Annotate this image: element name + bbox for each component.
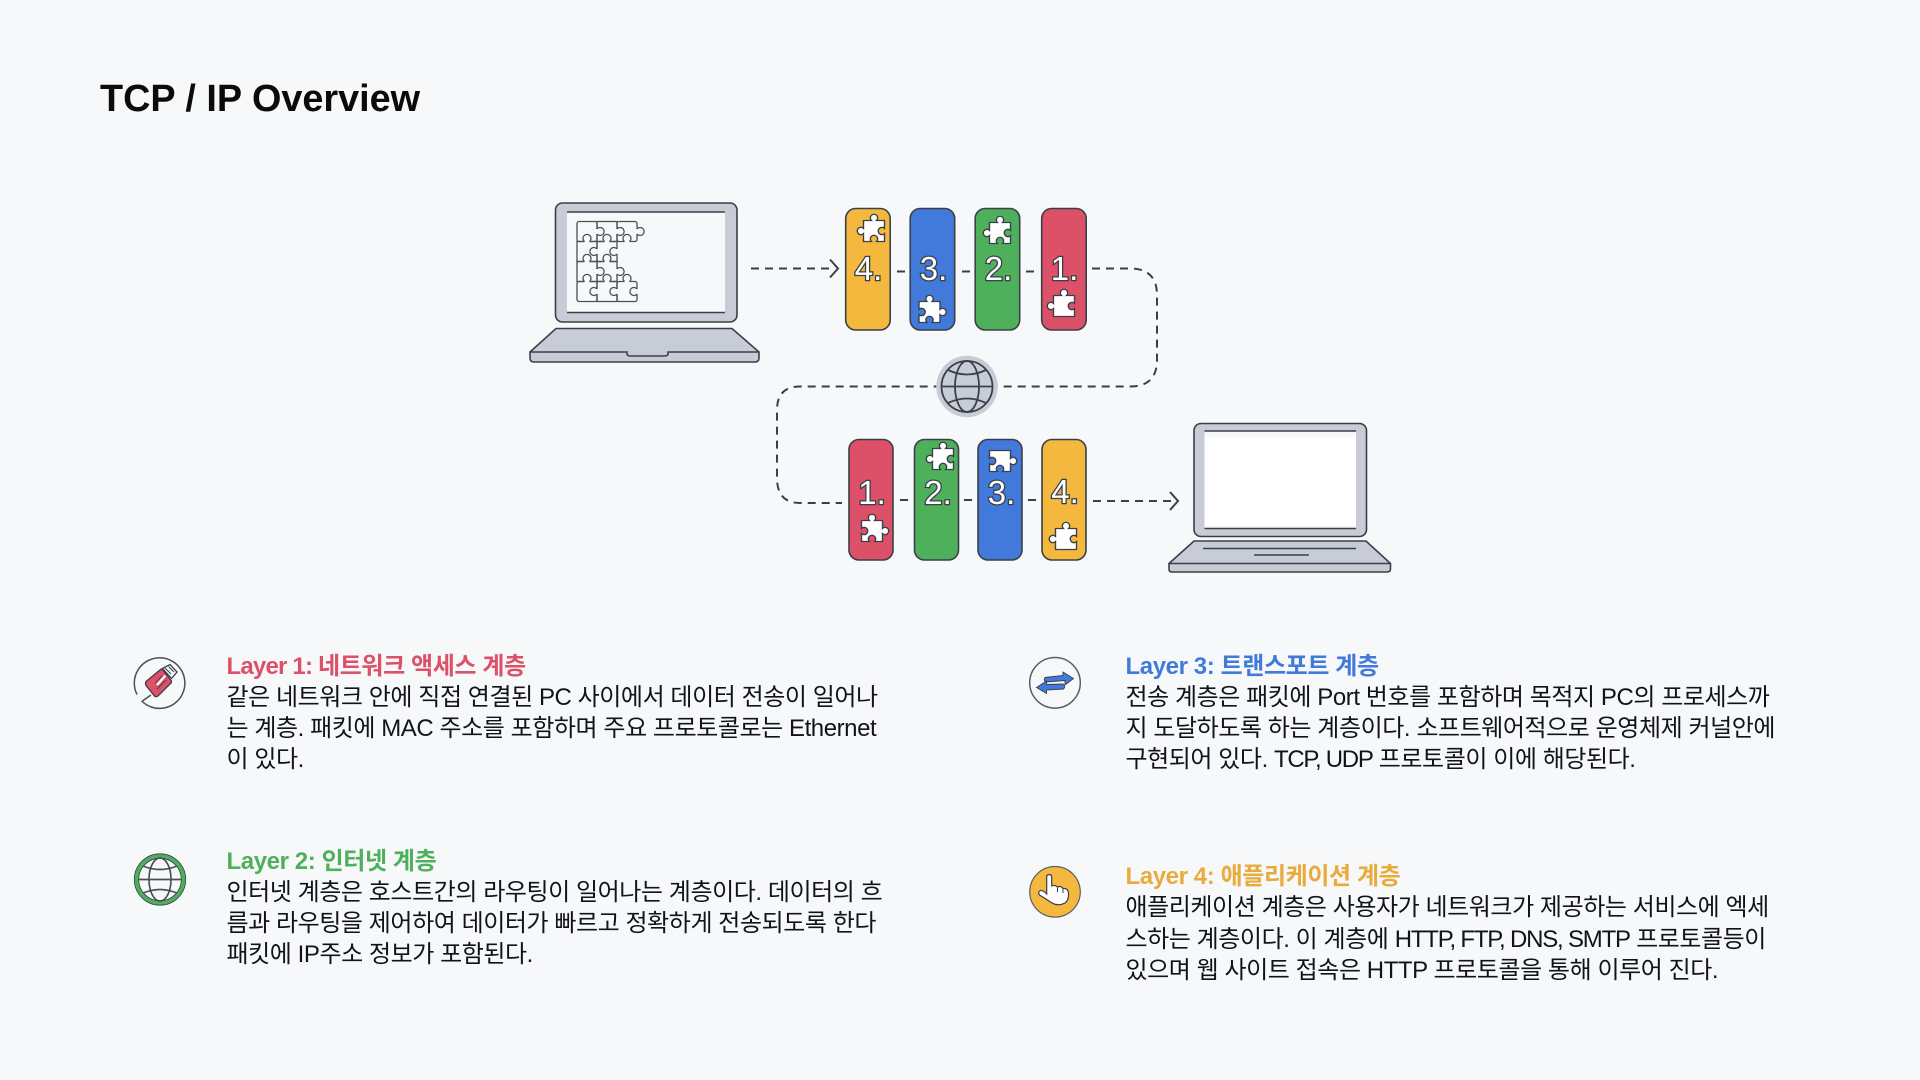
connectors between bottom pills <box>900 499 1036 501</box>
heading: layer 4: Layer 4: 애플리케이션 계층 <box>1126 863 1400 890</box>
body: layer 1: 같은 네트워크 안에 직접 연결된 PC 사이에서 데이터 전송이 일어나 <box>226 684 878 711</box>
pill: layer 2 sender <box>975 208 1020 330</box>
body: layer 1: 는 계층. 패킷에 MAC 주소를 포함하며 주요 프로토콜로는 Ethernet <box>226 715 876 742</box>
pill: layer 2 receiver: 2. <box>924 474 952 511</box>
pill: layer 4 receiver <box>1042 440 1086 560</box>
heading: layer 3: Layer 3: 트랜스포트 계층 <box>1126 653 1379 680</box>
icon: layer 3 transport arrows <box>1030 658 1080 708</box>
body: layer 2: 름과 라우팅을 제어하여 데이터가 빠르고 정확하게 전송되도록 한다 <box>226 910 876 937</box>
connector: dashed route through the globe <box>777 268 1157 503</box>
icon: layer 2 globe <box>134 854 186 905</box>
text block: layer 2 <box>226 848 882 968</box>
body: layer 3 <box>1126 684 1775 773</box>
body: layer 2: 인터넷 계층은 호스트간의 라우팅이 일어나는 계층이다. 데이터의 흐 <box>226 879 882 906</box>
body: layer 4: 애플리케이션 계층은 사용자가 네트워크가 제공하는 서비스에 엑세 <box>1126 894 1769 921</box>
text block: layer 1 <box>226 653 878 773</box>
body: layer 3: 지 도달하도록 하는 계층이다. 소프트웨어적으로 운영체제 커널안에 <box>1126 715 1775 742</box>
body: layer 1 <box>226 684 878 773</box>
pill: layer 2 receiver <box>914 440 958 560</box>
connector: dashed arrow to receiving laptop <box>1093 492 1178 510</box>
pill: layer 4 sender <box>846 208 890 330</box>
title: TCP / IP Overview <box>100 78 420 120</box>
connectors between top pills <box>897 270 1034 272</box>
pill: layer 4 receiver: 4. <box>1051 473 1079 510</box>
body: layer 3: 구현되어 있다. TCP, UDP 프로토콜이 이에 해당된다. <box>1126 746 1636 773</box>
heading: layer 2: Layer 2: 인터넷 계층 <box>226 848 436 875</box>
icon: layer 4 pointing hand <box>1030 866 1080 917</box>
body: layer 4: 있으며 웹 사이트 접속은 HTTP 프로토콜을 통해 이루어 진다. <box>1126 957 1718 984</box>
body: layer 2 <box>226 879 882 968</box>
text block: layer 4 <box>1126 863 1769 984</box>
body: layer 4: 스하는 계층이다. 이 계층에 HTTP, FTP, DNS, SMTP 프로토콜등이 <box>1126 926 1766 953</box>
body: layer 2: 패킷에 IP주소 정보가 포함된다. <box>226 941 533 968</box>
pill: layer 3 sender: 3. <box>920 250 947 287</box>
body: layer 1: 이 있다. <box>226 746 304 773</box>
icon: network globe <box>936 356 998 417</box>
connector: dashed path from sending laptop to pills <box>751 260 838 278</box>
pill: layer 3 sender <box>910 208 955 330</box>
pill: layer 1 sender: 1. <box>1051 250 1078 287</box>
pill: layer 1 sender <box>1042 208 1086 330</box>
pill: layer 3 receiver <box>978 440 1022 560</box>
laptop: sender <box>530 203 759 362</box>
pill: layer 1 receiver: 1. <box>858 474 886 511</box>
laptop: receiver <box>1169 424 1390 572</box>
heading: layer 1: Layer 1: 네트워크 액세스 계층 <box>226 653 526 680</box>
pill: layer 1 receiver <box>849 440 893 560</box>
icon: layer 1 network plug <box>134 658 185 708</box>
body: layer 4 <box>1126 894 1769 984</box>
pill: layer 2 sender: 2. <box>985 250 1012 287</box>
icon: puzzle assembled on screen <box>577 222 644 302</box>
pill: layer 4 sender: 4. <box>855 250 882 287</box>
text block: layer 3 <box>1126 653 1775 773</box>
body: layer 3: 전송 계층은 패킷에 Port 번호를 포함하며 목적지 PC의 프로세스까 <box>1126 684 1769 711</box>
pill: layer 3 receiver: 3. <box>988 474 1015 511</box>
